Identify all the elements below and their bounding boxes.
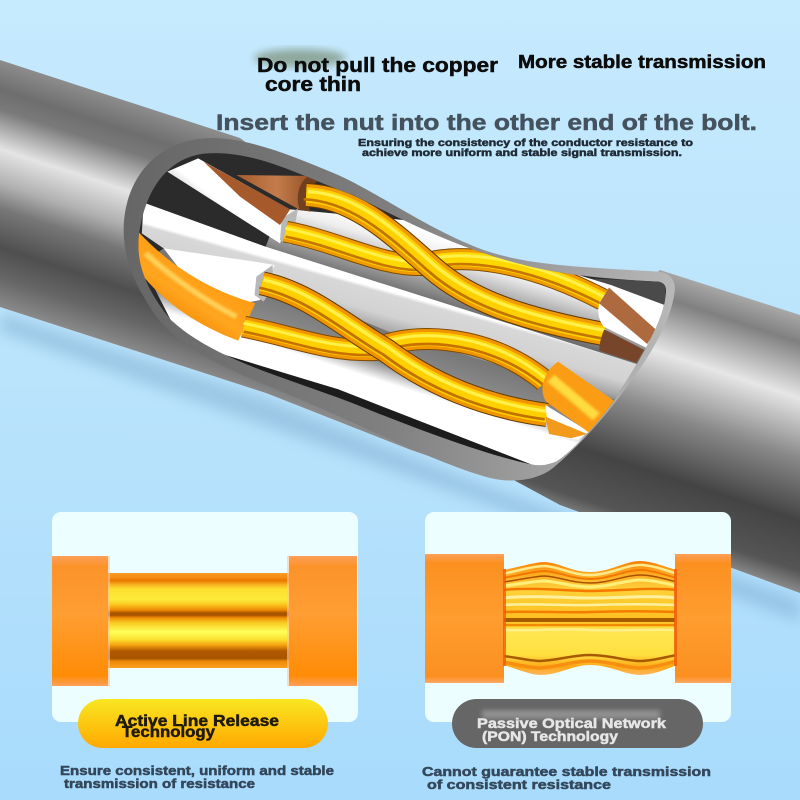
- orange insulation right: [675, 554, 731, 683]
- orange insulation left: [425, 554, 504, 683]
- right end: small orange wire: [545, 417, 587, 438]
- heading: copper core: Do not pull the copper: [257, 55, 498, 77]
- caption: Ensure consistent, uniform and stable: [60, 763, 334, 778]
- gold conductor: lower over strand: [259, 280, 549, 419]
- caption: of consistent resistance: [427, 777, 611, 792]
- gold conductor, deformed: [503, 561, 677, 675]
- pill label: (PON) Technology: [482, 728, 618, 744]
- right end: white wire: [598, 285, 669, 348]
- pill label: Active Line Release: [115, 713, 279, 730]
- gold conductor: lower under strand: [244, 323, 545, 387]
- white backing strip behind upper pair: [265, 208, 665, 367]
- cable wall ring: [124, 138, 675, 481]
- caption: [60, 763, 334, 791]
- heading: copper core: core thin: [265, 74, 361, 96]
- subtitle: achieve more uniform and stable signal transmission.: [362, 147, 682, 159]
- orange cone highlight: [551, 378, 596, 417]
- cut-away opening of the cable: [124, 138, 675, 480]
- wire collars: [255, 208, 298, 302]
- pill label: Passive Optical Network: [477, 715, 666, 731]
- cable shadow: [0, 312, 800, 622]
- cable body: right section: [510, 270, 800, 593]
- dark wedge along bottom: [224, 354, 531, 464]
- lower grey to white region: [142, 248, 640, 470]
- caption: transmission of resistance: [64, 776, 255, 791]
- orange insulation left: [52, 556, 108, 686]
- smudge behind heading: [254, 49, 346, 67]
- heading: copper core: [257, 55, 498, 96]
- right end: dark brown wire: [599, 329, 644, 363]
- pill label: [78, 699, 328, 748]
- dark interior: [138, 153, 666, 466]
- gold conductor, straight: [106, 573, 290, 668]
- card: [425, 512, 731, 722]
- internal conductors: [138, 153, 666, 466]
- orange wire highlight: [145, 253, 236, 317]
- central white sheath: [142, 203, 640, 402]
- panel: passive optical network technology: [422, 512, 731, 792]
- lower white insulated wire: [164, 248, 275, 303]
- card: [52, 512, 358, 722]
- caption: [422, 764, 711, 792]
- subtitle: [358, 137, 693, 159]
- pill label: Technology: [122, 724, 215, 741]
- brown insulated cone: [236, 175, 316, 210]
- heading group: [216, 49, 766, 159]
- cable illustration: [0, 60, 800, 622]
- heading: stable transmission: More stable transmission: [518, 52, 766, 72]
- orange insulated wire: [138, 232, 255, 341]
- dark grey right pocket: [585, 278, 665, 307]
- upper white insulated wire: [167, 158, 291, 243]
- brown insulated wire sliver: [204, 162, 290, 225]
- right end: brown stripe: [599, 288, 656, 344]
- gold conductor: upper over strand: [304, 192, 605, 338]
- right end: orange cone: [542, 362, 615, 433]
- cable body: left section: [0, 60, 470, 470]
- gold conductor: upper under strand: [285, 228, 604, 305]
- right end: lower white wire: [545, 405, 589, 440]
- caption: Cannot guarantee stable transmission: [422, 764, 711, 779]
- orange insulation right: [289, 556, 357, 686]
- panel: active line release technology: [52, 512, 358, 791]
- main title: Insert the nut into the other end of the bolt.: [216, 110, 757, 135]
- pill label: [452, 699, 703, 748]
- subtitle: Ensuring the consistency of the conductor resistance to: [358, 137, 693, 149]
